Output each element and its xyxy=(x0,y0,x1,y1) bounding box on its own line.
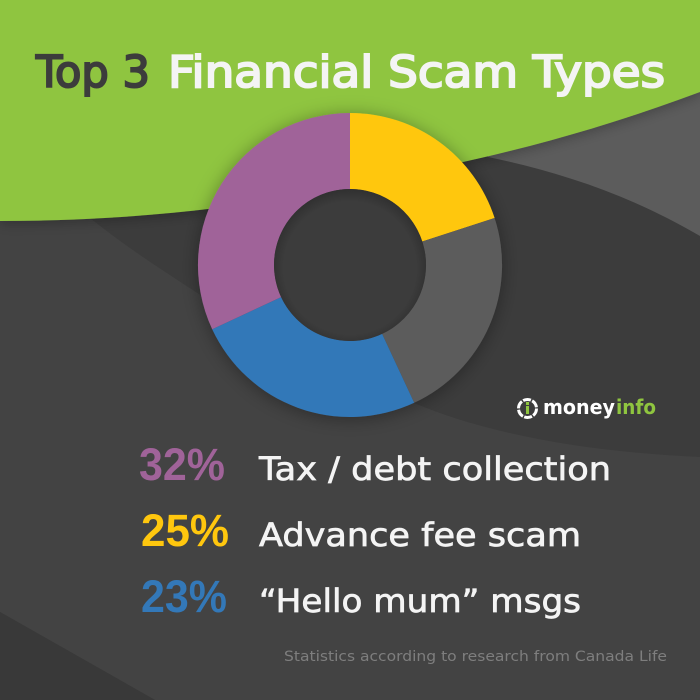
logo wordmark: money xyxy=(543,395,615,419)
donut chart xyxy=(198,113,502,417)
donut hole xyxy=(274,189,426,341)
icon: info ring xyxy=(518,400,536,418)
title: Financial Scam Types xyxy=(168,47,665,98)
row: tax debt collection: 32% xyxy=(139,439,225,490)
source note: Statistics according to research from Canada Life xyxy=(284,649,667,665)
title: Top 3 xyxy=(35,47,150,98)
statistics list xyxy=(139,439,611,622)
segment: blue xyxy=(212,297,414,417)
row: advance fee scam: 25% xyxy=(141,505,229,556)
row: advance fee scam xyxy=(141,505,581,556)
segment: yellow xyxy=(350,113,495,242)
row: tax debt collection: Tax / debt collection xyxy=(258,450,611,488)
row: hello mum messages: “Hello mum” msgs xyxy=(259,582,581,620)
row: hello mum messages: 23% xyxy=(141,571,227,622)
bottom left shade xyxy=(0,612,155,700)
segment: grey xyxy=(382,218,502,403)
row: advance fee scam: Advance fee scam xyxy=(259,516,581,554)
segment: purple xyxy=(198,113,350,329)
green header band xyxy=(0,0,700,221)
logo: moneyinfo xyxy=(518,395,656,419)
row: hello mum messages xyxy=(141,571,581,622)
row: tax debt collection xyxy=(139,439,611,490)
logo wordmark: info xyxy=(616,395,656,419)
